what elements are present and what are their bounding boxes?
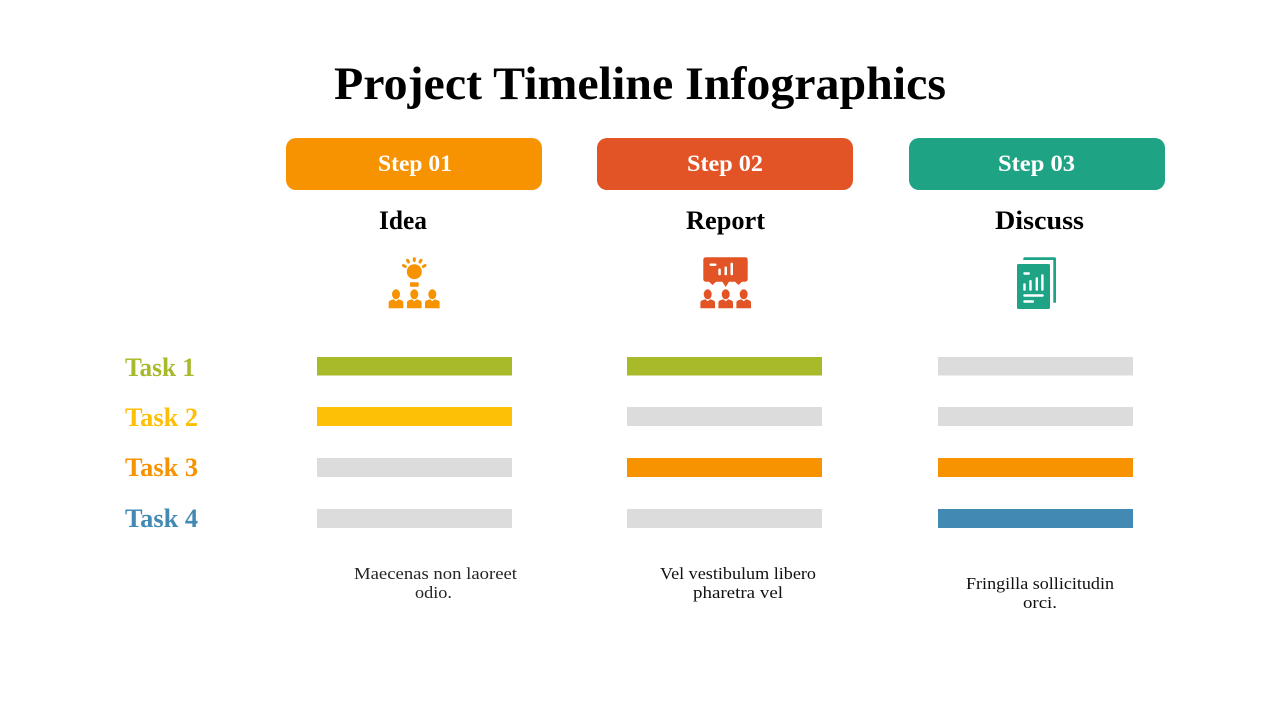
title: Project Timeline Infographics xyxy=(334,58,946,110)
row: Task 2: Task 2 xyxy=(125,403,198,432)
row: Task 3 xyxy=(125,453,1133,482)
heading: Report: Report xyxy=(686,206,765,235)
row: Task 4 xyxy=(125,504,1133,533)
step 03 column header xyxy=(909,138,1165,190)
text block: step 03 description: Fringilla sollicitudin xyxy=(966,574,1115,593)
text block: step 02 description: Vel vestibulum libero xyxy=(660,564,816,583)
icon: light bulb above people xyxy=(389,259,440,308)
step 01 column header xyxy=(286,138,542,190)
heading: Discuss: Discuss xyxy=(995,206,1084,235)
text block: step 03 description xyxy=(966,574,1115,612)
step 02 column header: Step 02 xyxy=(687,151,763,176)
icon: report document with chart xyxy=(1017,257,1056,309)
icon: speech bubble chart above people xyxy=(700,257,751,308)
text block: step 03 description: orci. xyxy=(1023,593,1057,612)
row: Task 3: Task 3 xyxy=(125,453,198,482)
row: Task 4: Task 4 xyxy=(125,504,198,533)
text block: step 02 description: pharetra vel xyxy=(693,583,783,602)
step 03 column header: Step 03 xyxy=(998,151,1075,176)
text block: step 01 description: Maecenas non laoreet xyxy=(354,564,517,583)
row: Task 1: Task 1 xyxy=(125,353,195,382)
row: Task 2 xyxy=(125,403,1133,432)
text block: step 01 description: odio. xyxy=(415,583,452,602)
text block: step 02 description xyxy=(660,564,816,602)
heading: Idea: Idea xyxy=(379,206,427,235)
row: Task 1 xyxy=(125,353,1133,382)
step 02 column header xyxy=(597,138,853,190)
text block: step 01 description xyxy=(354,564,517,602)
step 01 column header: Step 01 xyxy=(378,151,452,176)
